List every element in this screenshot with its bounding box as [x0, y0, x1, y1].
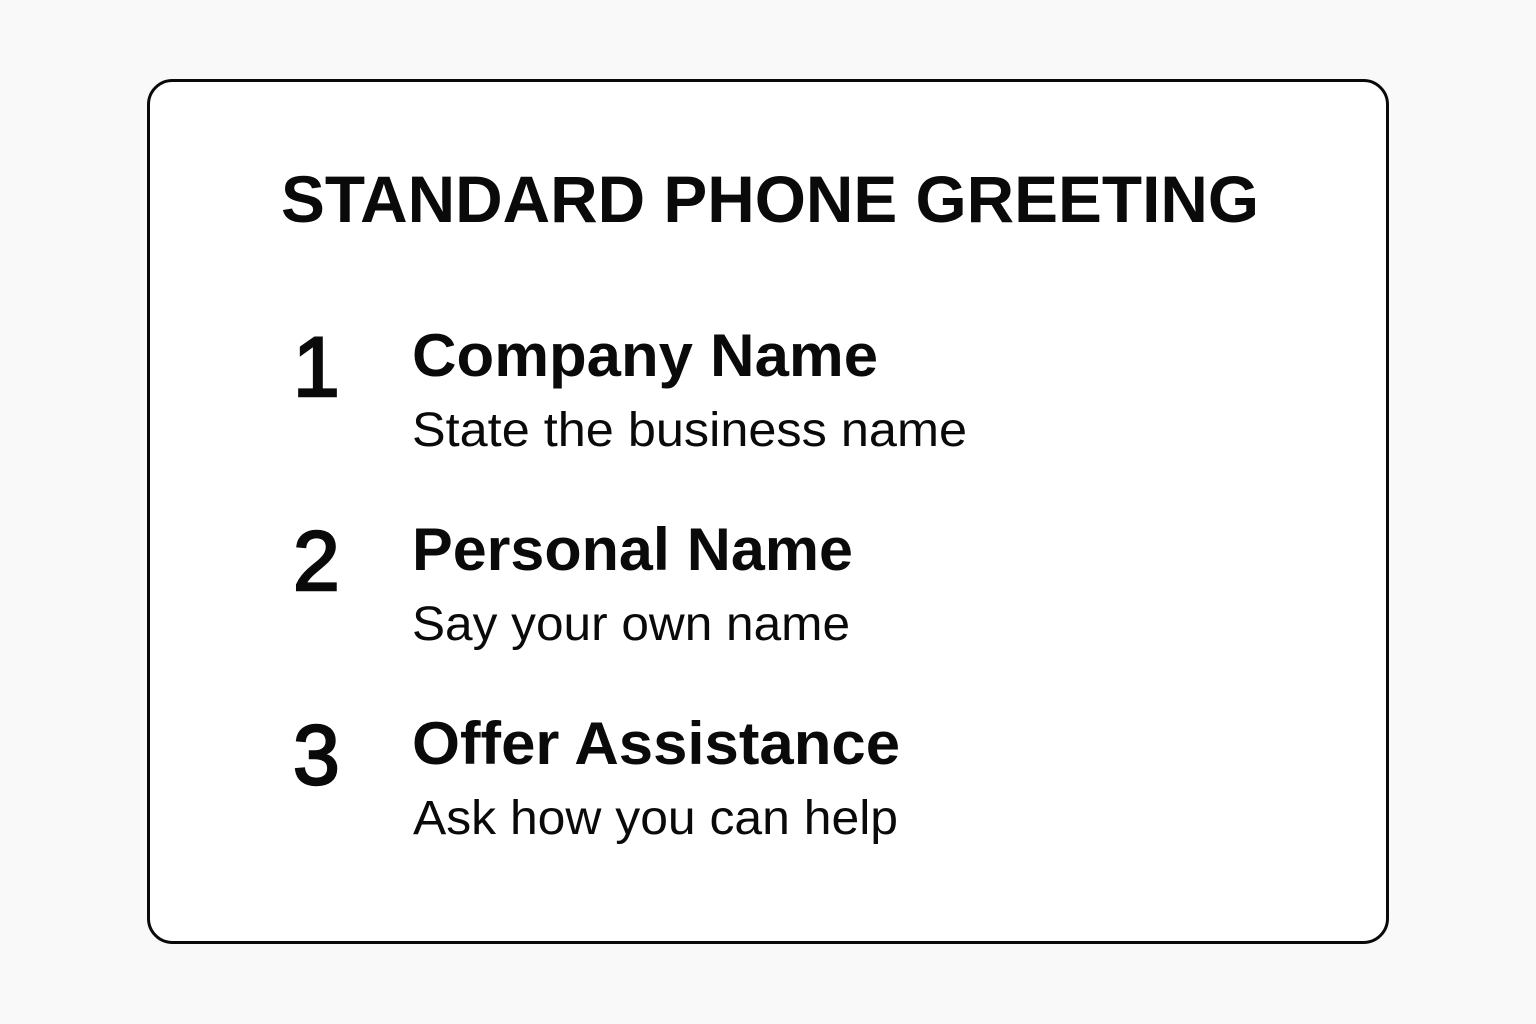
description 2: Say your own name	[412, 598, 850, 651]
step 2	[293, 514, 853, 651]
number 2: 2	[293, 514, 340, 608]
step 3	[293, 708, 900, 845]
panel: greeting card	[148, 80, 1388, 942]
number 3: 3	[293, 708, 340, 802]
number 1: 1	[293, 320, 340, 414]
heading: Offer Assistance: Offer Assistance	[412, 710, 900, 777]
title: STANDARD PHONE GREETING	[281, 162, 1259, 236]
step 1	[293, 320, 967, 457]
heading: Company Name: Company Name	[412, 322, 878, 389]
heading: Personal Name: Personal Name	[412, 516, 853, 583]
description 3: Ask how you can help	[413, 792, 898, 845]
description 1: State the business name	[412, 404, 967, 457]
